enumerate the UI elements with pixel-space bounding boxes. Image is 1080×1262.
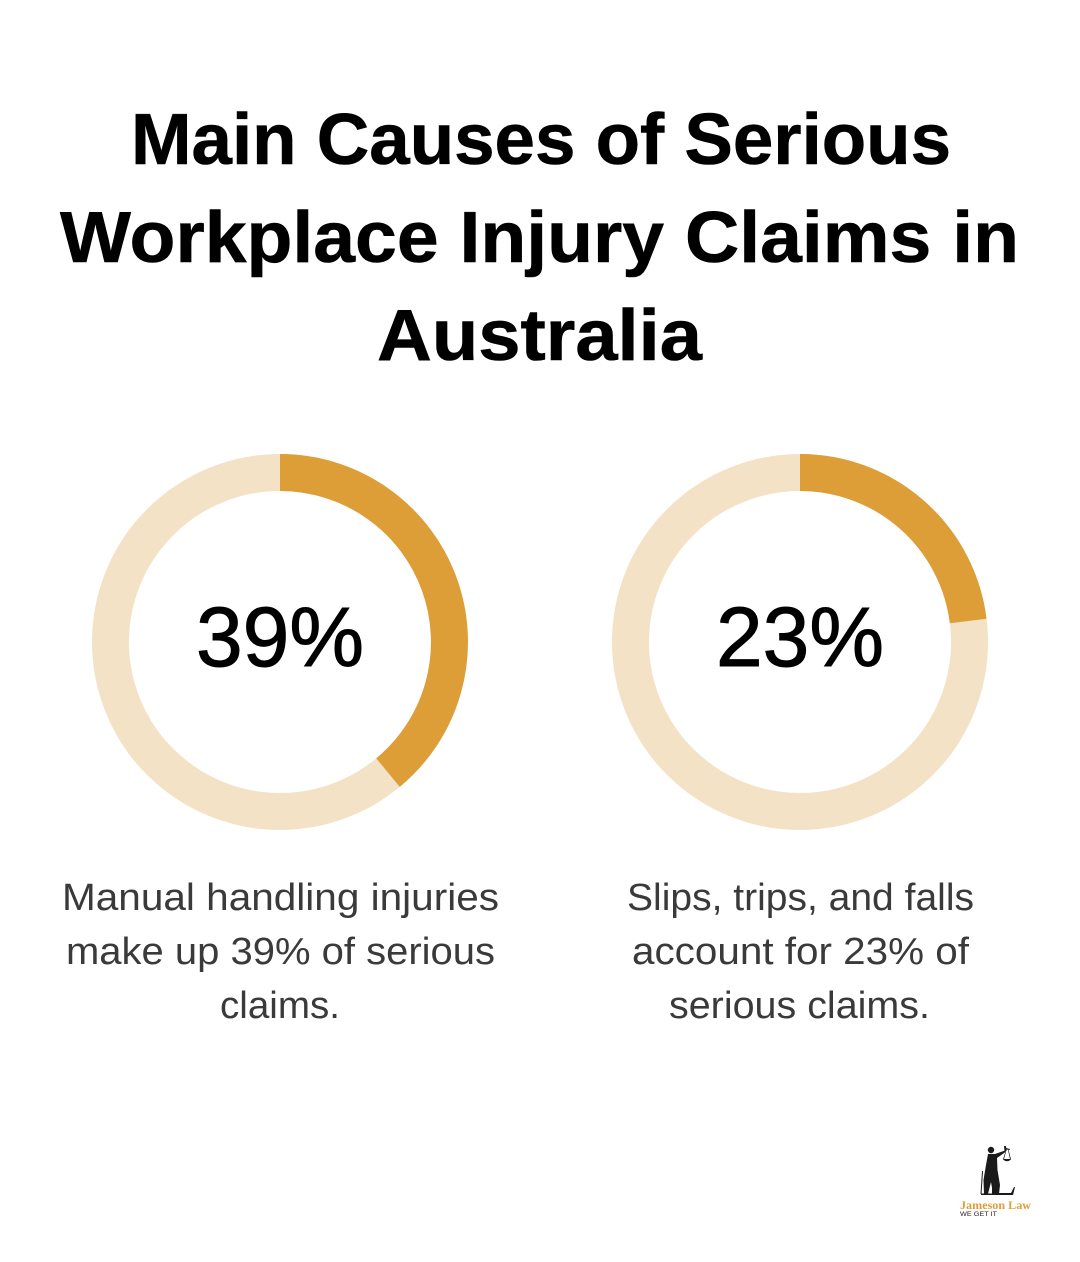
donut chart: 39%: [110, 472, 450, 812]
panel: slips, trips and falls: [627, 472, 974, 1027]
description: slips, trips and falls: serious claims.: [669, 985, 930, 1027]
description: slips, trips and falls: account for 23% of: [632, 931, 969, 973]
description: manual handling: Manual handling injuries: [62, 877, 499, 919]
title: Main Causes of Serious: [131, 100, 951, 180]
description: manual handling: make up 39% of serious: [66, 931, 495, 973]
wordmark: Jameson Law: [960, 1200, 1032, 1212]
icon: lady justice with L: [980, 1146, 1015, 1195]
panel: manual handling: [62, 472, 499, 1027]
stat: 23%: 23%: [716, 590, 884, 684]
description: manual handling: [62, 877, 499, 1027]
description: slips, trips and falls: [627, 877, 974, 1027]
description: manual handling: claims.: [220, 985, 340, 1027]
title: [60, 100, 1019, 376]
logo: Jameson Law: [960, 1146, 1032, 1218]
description: slips, trips and falls: Slips, trips, and falls: [627, 877, 974, 919]
title: Workplace Injury Claims in: [60, 198, 1019, 278]
tagline: WE GET IT: [960, 1211, 997, 1218]
title: Australia: [377, 296, 703, 376]
donut chart: 23%: [630, 472, 970, 812]
stat: 39%: 39%: [196, 590, 364, 684]
